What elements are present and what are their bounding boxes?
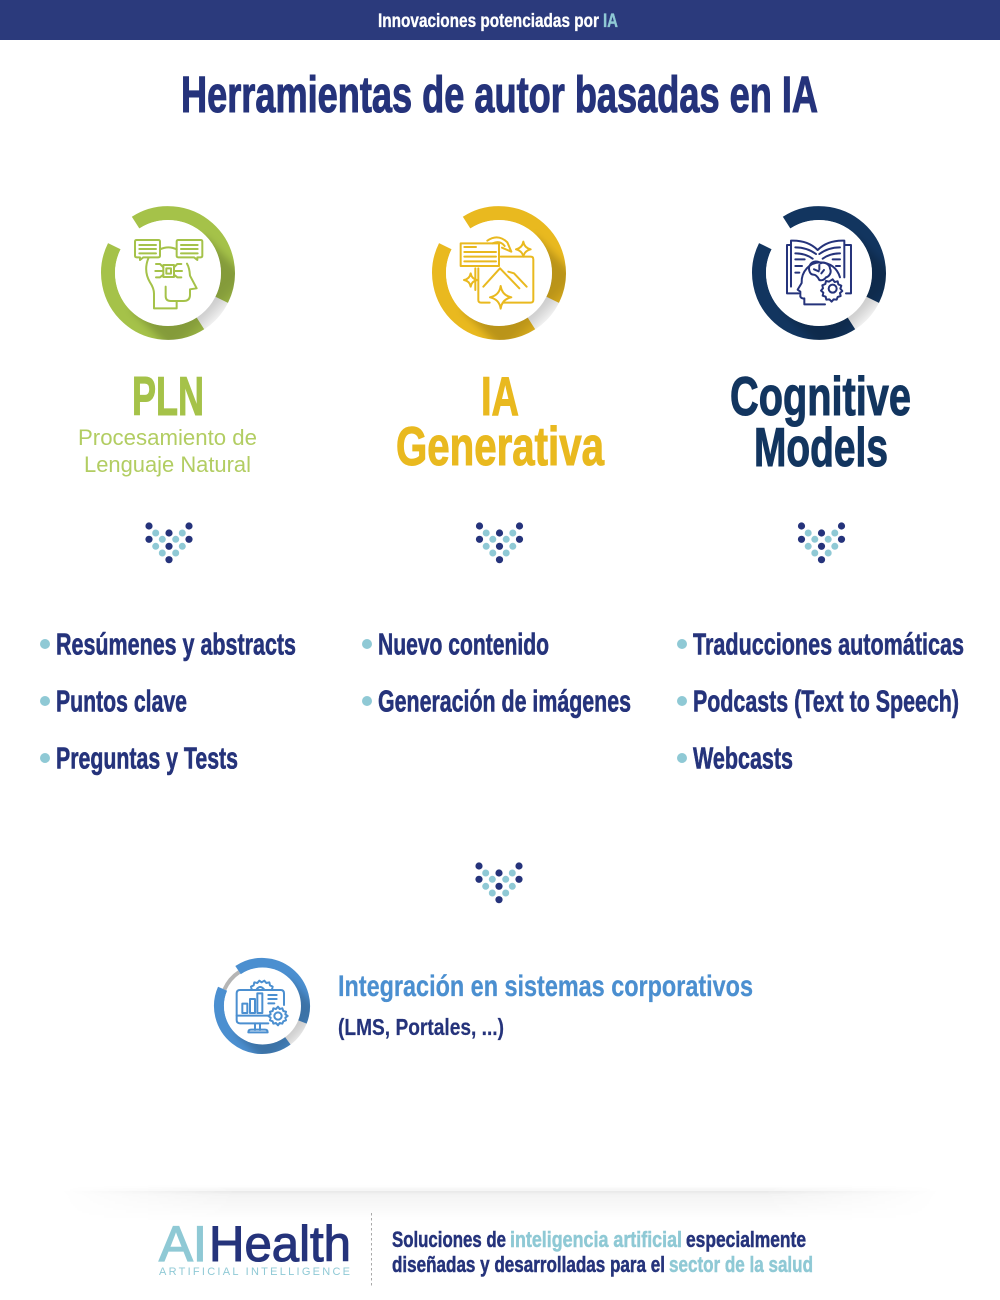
logo: AIHealth: [159, 1216, 351, 1278]
list: PLN uses: Puntos clave: [56, 684, 187, 718]
list: IA Generativa uses: Generación de imágenes: [378, 684, 631, 718]
icon: dots arrow to integration: [475, 862, 523, 903]
list: PLN uses: Preguntas y Tests: [56, 740, 238, 776]
heading: Cognitive Models: [730, 365, 911, 478]
icon: cognitive ring with book and head: [752, 206, 886, 340]
list: IA Generativa uses: Nuevo contenido: [378, 626, 549, 662]
panel: IA Generativa: [362, 213, 631, 718]
list: Cognitive Models uses: [677, 626, 964, 776]
icon: monitor ring with chart and gears: [214, 958, 310, 1054]
list: Cognitive Models uses: Webcasts: [693, 740, 793, 776]
text: tagline: sector de la salud: [669, 1252, 813, 1277]
top banner: IA: [603, 11, 618, 32]
icon: dots arrow: [145, 522, 193, 563]
text: examples: (LMS, Portales, ...): [338, 1014, 504, 1040]
top banner: [0, 0, 1000, 40]
subheading: Procesamiento de Lenguaje Natural: Lenguaje Natural: [84, 452, 251, 477]
icon: PLN ring with head and chip: [101, 206, 235, 340]
text: tagline: especialmente: [686, 1227, 806, 1252]
icon: dots arrow: [798, 522, 845, 563]
text: tagline: diseñadas y desarrolladas para el: [392, 1252, 665, 1277]
panel: Cognitive Models: [677, 213, 964, 776]
subheading: Procesamiento de Lenguaje Natural: [78, 425, 257, 477]
text: tagline: Soluciones de: [392, 1227, 506, 1252]
heading: Cognitive Models: Cognitive: [730, 365, 911, 427]
icon: dots arrow: [476, 522, 523, 563]
logo: AIHealth: AI: [159, 1216, 207, 1272]
heading: IA Generativa: Generativa: [396, 415, 604, 477]
footer: [132, 1190, 868, 1286]
subheading: Procesamiento de Lenguaje Natural: Procesamiento de: [78, 425, 257, 450]
list: IA Generativa uses: [362, 626, 631, 718]
panel: PLN: [40, 213, 296, 775]
heading: IA Generativa: IA: [481, 365, 519, 427]
list: PLN uses: [40, 626, 296, 776]
panel: integration: [214, 958, 752, 1054]
icon: generative ring with image and document: [432, 206, 566, 340]
logo: AIHealth: ARTIFICIAL INTELLIGENCE: [159, 1266, 350, 1278]
top banner: Innovaciones potenciadas por: [378, 11, 599, 32]
heading: PLN: PLN: [132, 365, 204, 427]
list: PLN uses: Resúmenes y abstracts: [56, 626, 296, 662]
text: tagline: [392, 1227, 813, 1277]
logo: AIHealth: Health: [209, 1216, 351, 1272]
heading: Cognitive Models: Models: [754, 416, 888, 478]
heading: integration: Integración en sistemas corporativos: [338, 970, 753, 1003]
heading: IA Generativa: [396, 365, 604, 477]
text: tagline: inteligencia artificial: [510, 1227, 682, 1252]
